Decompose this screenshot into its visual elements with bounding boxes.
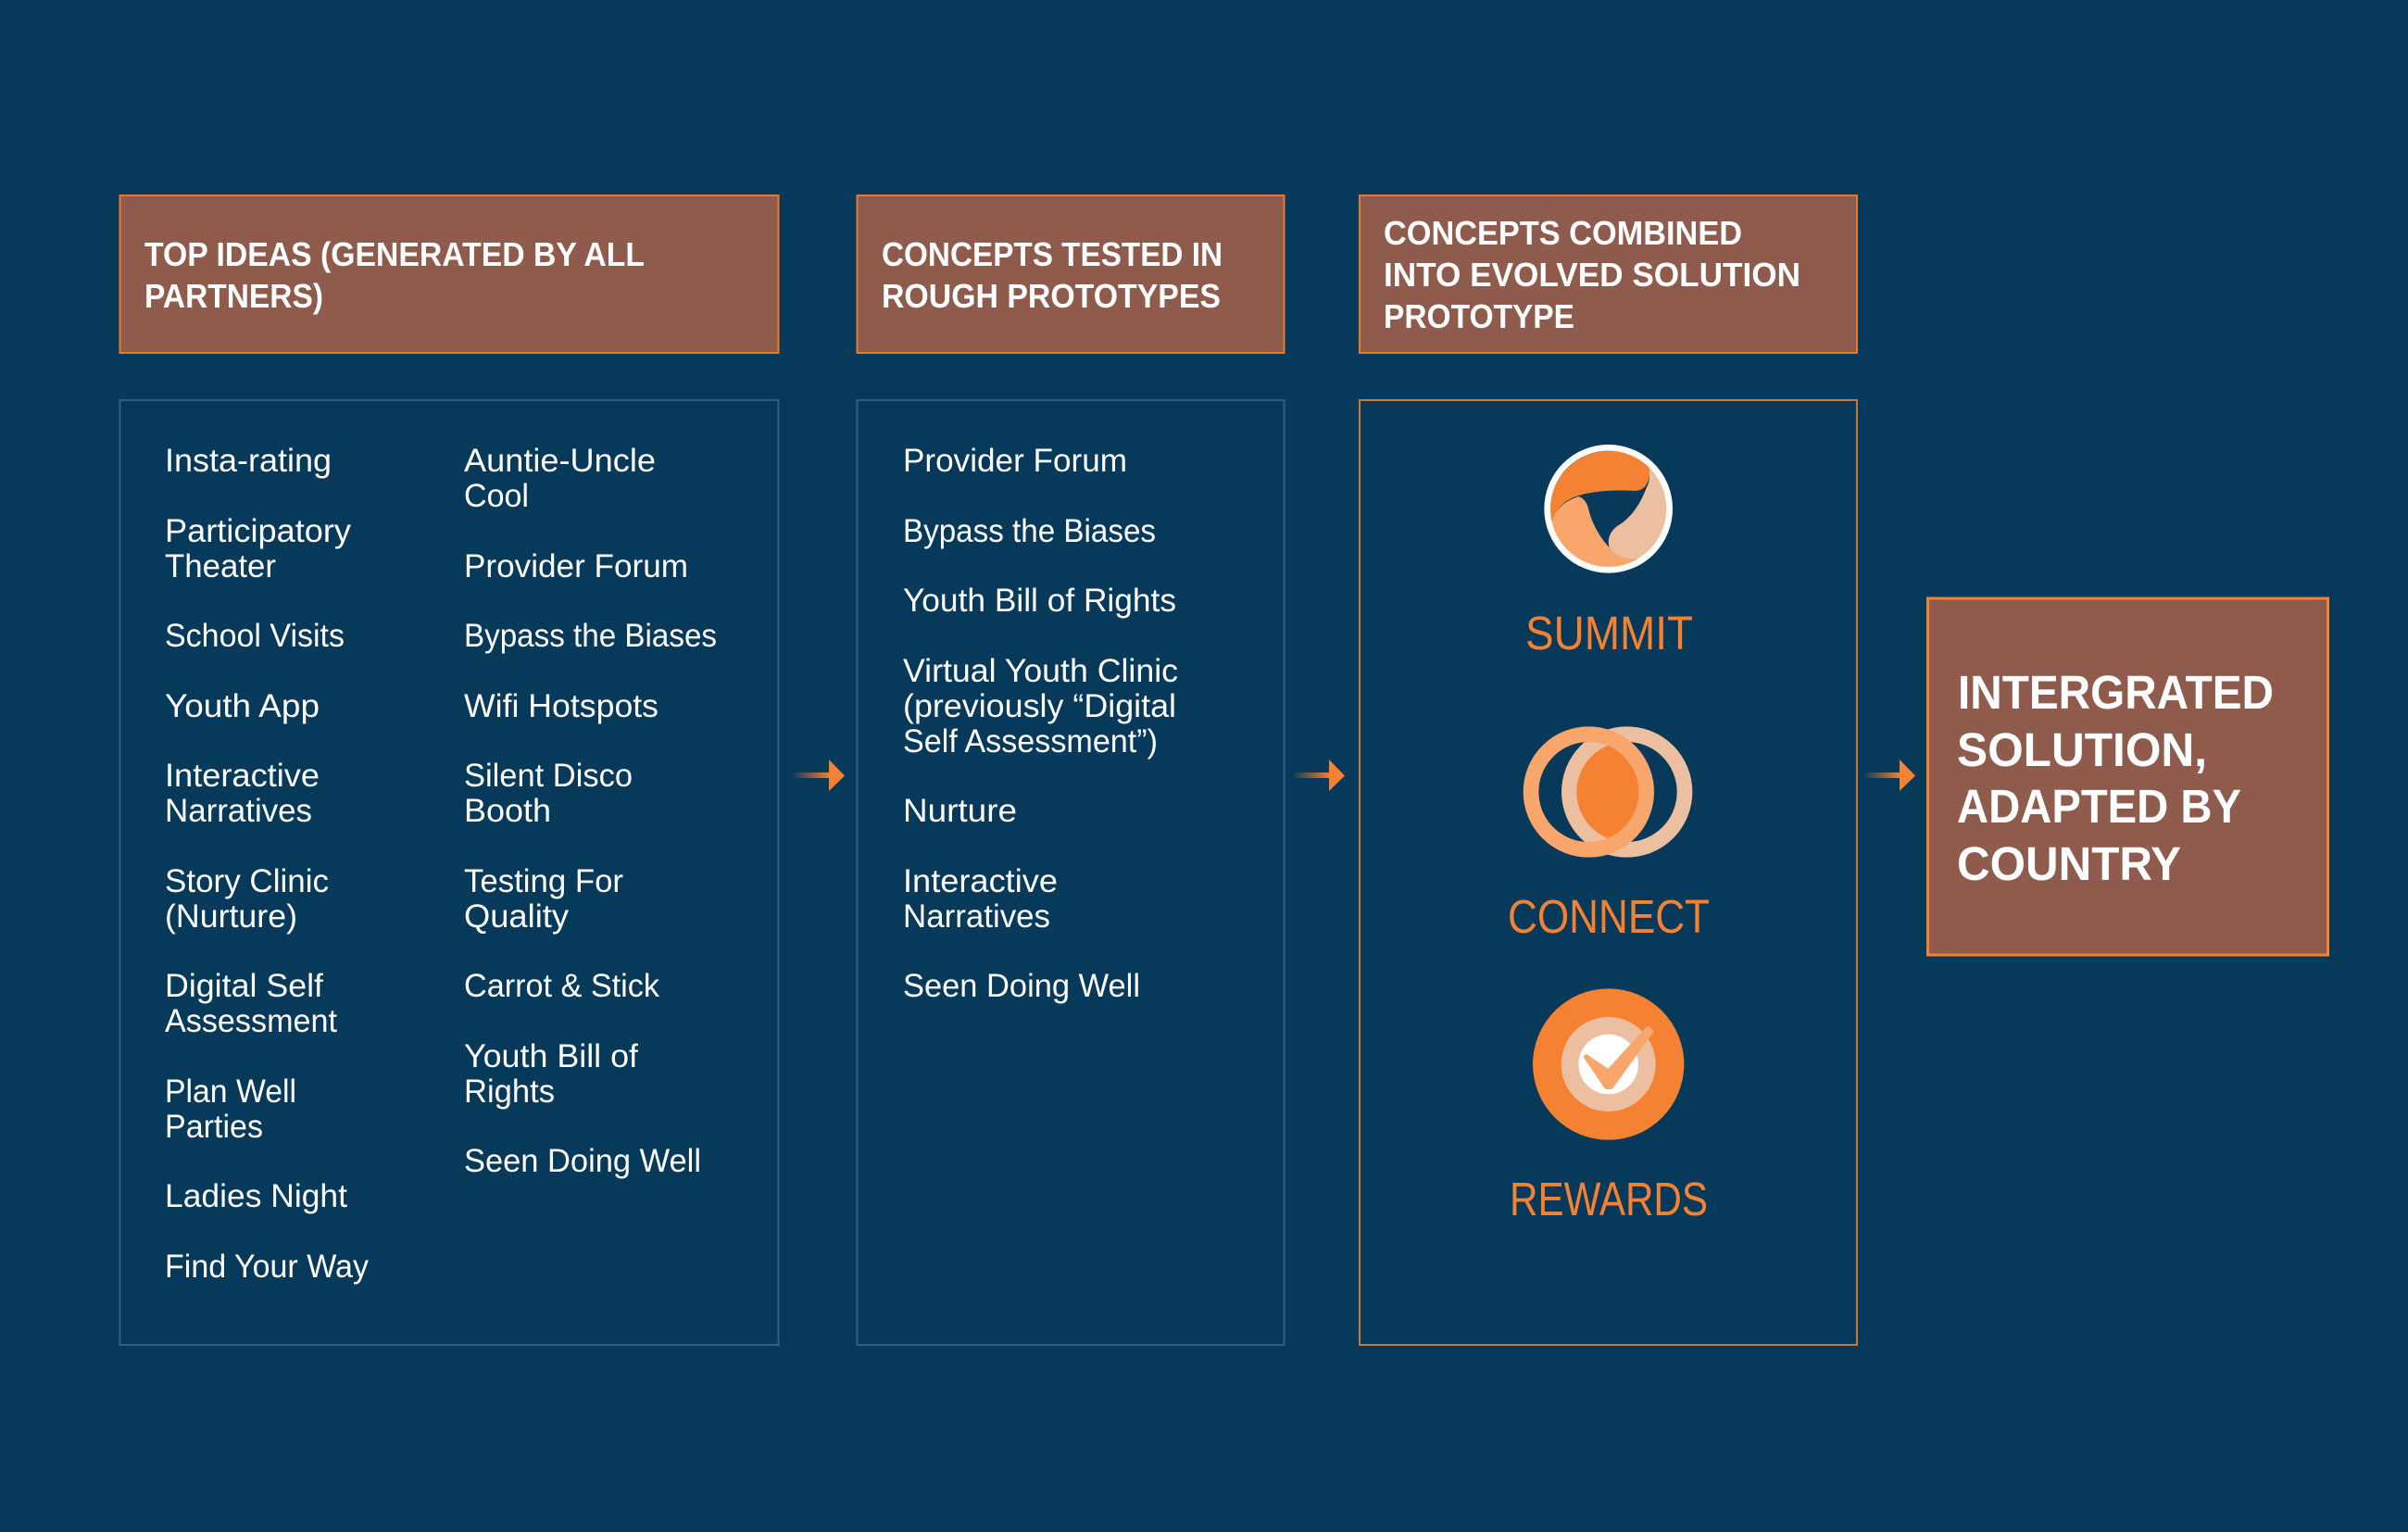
panel: concepts tested list: Virtual Youth Clinic (903, 653, 1178, 689)
panel: integrated solution: INTERGRATED (1958, 666, 2274, 719)
list column 1: Digital Self (165, 968, 323, 1004)
panel: top ideas list (120, 400, 778, 1345)
icon: connect (1531, 735, 1685, 849)
panel: concepts tested list: Youth Bill of Rights (903, 583, 1176, 619)
panel: concepts tested header: ROUGH PROTOTYPES (882, 277, 1221, 315)
list column 1: (Nurture) (165, 898, 297, 935)
list column 2: Bypass the Biases (464, 618, 717, 654)
panel: concepts tested list: (previously “Digital (903, 688, 1176, 724)
panel: concepts tested list: Nurture (903, 793, 1017, 829)
list column 2: Testing For (464, 863, 623, 899)
list column 1: Participatory (165, 513, 352, 549)
list column 1: Interactive (165, 758, 320, 794)
panel: concepts tested list: Self Assessment”) (903, 723, 1158, 760)
icon: rewards (1533, 988, 1684, 1140)
panel: integrated solution: ADAPTED BY (1957, 780, 2241, 833)
list column 2: Silent Disco (464, 758, 633, 794)
list column 1: Assessment (165, 1003, 337, 1039)
list column 1: Narratives (165, 793, 312, 829)
panel: top ideas header (120, 195, 778, 353)
panel: integrated solution: SOLUTION, (1957, 723, 2207, 776)
panel: concepts combined header (1360, 195, 1857, 353)
list column 1: Story Clinic (165, 863, 329, 899)
label: connect: CONNECT (1508, 890, 1710, 943)
list column 2: Auntie-Uncle (464, 443, 656, 479)
panel: concepts tested header (858, 195, 1284, 353)
list column 1: Parties (165, 1109, 263, 1145)
panel: concepts tested list: Provider Forum (903, 443, 1127, 479)
list column 1: Find Your Way (165, 1249, 369, 1285)
list column 1: School Visits (165, 618, 345, 654)
list column 2: Provider Forum (464, 548, 688, 584)
list column 2: Seen Doing Well (464, 1143, 701, 1179)
label: rewards: REWARDS (1510, 1173, 1708, 1225)
panel: concepts tested list: Bypass the Biases (903, 513, 1156, 549)
panel: concepts tested list: Seen Doing Well (903, 968, 1140, 1004)
panel: concepts combined header: PROTOTYPE (1384, 297, 1574, 335)
list column 2 (464, 443, 717, 1179)
list column 2: Rights (464, 1074, 555, 1110)
panel: top ideas header: TOP IDEAS (GENERATED BY ALL (144, 235, 645, 273)
panel: concepts combined header: INTO EVOLVED SOLUTION (1384, 256, 1800, 294)
label: summit: SUMMIT (1525, 607, 1693, 659)
arrow: ideas to concepts (794, 760, 845, 791)
list column 1: Plan Well (165, 1074, 296, 1110)
panel: top ideas header: PARTNERS) (144, 277, 323, 315)
panel: concepts tested header: CONCEPTS TESTED IN (882, 235, 1223, 273)
list column 2: Cool (464, 478, 529, 514)
panel: concepts tested list (858, 400, 1284, 1345)
panel: integrated solution: COUNTRY (1957, 837, 2181, 890)
list column 2: Quality (464, 898, 570, 935)
panel: evolved solution prototype (1360, 400, 1857, 1345)
panel: concepts tested list: Narratives (903, 898, 1050, 935)
list column 1: Youth App (165, 688, 320, 724)
list column 2: Youth Bill of (464, 1038, 638, 1074)
list column 2: Wifi Hotspots (464, 688, 658, 724)
panel: integrated solution (1928, 598, 2328, 955)
panel: concepts combined header: CONCEPTS COMBINED (1384, 214, 1742, 252)
arrow: prototype to integrated solution (1864, 760, 1915, 791)
list column 1: Insta-rating (165, 443, 332, 479)
list column 2: Carrot & Stick (464, 968, 659, 1004)
panel: concepts tested list: Interactive (903, 863, 1058, 899)
list column 1 (165, 443, 369, 1285)
icon: summit (1548, 447, 1670, 570)
list column 2: Booth (464, 793, 551, 829)
list column 1: Ladies Night (165, 1178, 347, 1214)
list column 1: Theater (165, 548, 276, 584)
arrow: concepts to prototype (1294, 760, 1345, 791)
